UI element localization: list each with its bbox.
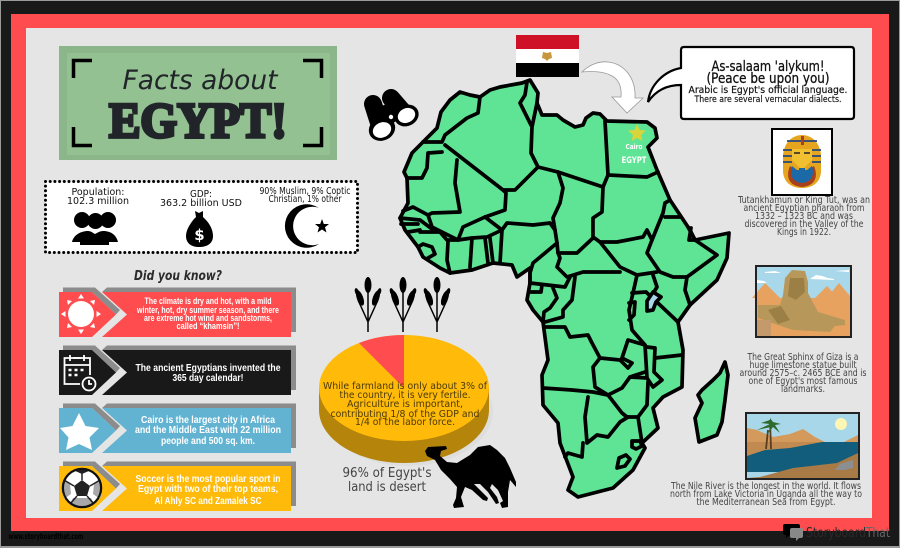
banner: climate: are extreme hot wind and sandstorms, xyxy=(144,313,272,323)
Storyboard That logo: Storyboard xyxy=(806,526,866,541)
speech bubble xyxy=(648,47,854,119)
icon: soccer ball xyxy=(62,468,102,508)
Storyboard That logo xyxy=(783,524,890,541)
image: Nile River xyxy=(746,413,859,479)
GDP stat: GDP: xyxy=(190,189,212,200)
Sphinx caption: around 2575–c. 2465 BCE and is xyxy=(740,368,866,379)
Storyboard That logo: That xyxy=(865,526,890,541)
pie chart: the country, it is very fertile. xyxy=(340,390,470,401)
banner: Cairo: and the Middle East with 22 million xyxy=(135,425,281,436)
banner: Cairo xyxy=(59,404,296,453)
wheat stalk 3 xyxy=(423,277,451,332)
banner: climate: winter, hot, dry summer season, and there xyxy=(136,305,279,315)
Nile caption xyxy=(670,481,862,508)
pie chart: contributing 1/8 of the GDP and xyxy=(330,409,480,420)
Nile caption: the Mediterranean Sea from Egypt. xyxy=(696,497,836,508)
icon: calendar xyxy=(64,355,96,390)
Egypt marker: Cairo xyxy=(626,143,643,151)
wheat stalk 2 xyxy=(389,277,417,332)
speech bubble: As-salaam 'alykum! xyxy=(712,59,824,75)
title panel: EGYPT! xyxy=(109,92,287,148)
icon: sun xyxy=(61,294,101,334)
banner: soccer: Soccer is the most popular sport in xyxy=(136,474,280,485)
pie chart xyxy=(319,335,493,466)
image: Sphinx xyxy=(752,266,851,337)
lake xyxy=(647,292,661,311)
desert caption: 96% of Egypt's xyxy=(342,466,432,481)
banner: soccer xyxy=(59,462,296,511)
Sphinx caption: The Great Sphinx of Giza is a xyxy=(747,352,858,363)
religion stat xyxy=(260,186,350,248)
banner: climate xyxy=(59,288,296,337)
Africa outline xyxy=(400,80,729,497)
title panel xyxy=(59,46,337,160)
banner: calendar xyxy=(59,346,296,395)
pie chart: While farmland is only about 3% of xyxy=(323,381,487,392)
Tutankhamun caption: 1332 – 1323 BC and was xyxy=(755,211,853,222)
banner: climate: called “khamsin”! xyxy=(176,321,240,331)
religion stat: 90% Muslim, 9% Coptic xyxy=(260,186,350,197)
Sphinx caption: landmarks. xyxy=(781,384,825,395)
speech bubble: (Peace be upon you) xyxy=(706,71,830,87)
Egypt marker: EGYPT xyxy=(622,156,647,166)
map of Africa xyxy=(400,80,729,497)
pie chart: 1/4 of the labor force. xyxy=(355,417,455,428)
icon: binoculars xyxy=(365,98,422,145)
speech bubble: Arabic is Egypt's official language. xyxy=(688,85,848,96)
icon: camel xyxy=(425,445,516,508)
population stat: 102.3 million xyxy=(67,196,129,207)
icon: Egyptian flag xyxy=(516,35,579,77)
Tutankhamun caption: ancient Egyptian pharaoh from xyxy=(744,203,864,214)
GDP stat: $ xyxy=(194,226,205,244)
wheat icons xyxy=(354,277,451,332)
banner: calendar: 365 day calendar! xyxy=(172,373,244,384)
Madagascar xyxy=(695,362,728,442)
icon: star xyxy=(60,413,99,450)
Sphinx caption xyxy=(740,352,866,395)
Tutankhamun caption: discovered in the Valley of the xyxy=(744,219,864,230)
image: Tutankhamun mask xyxy=(772,129,832,195)
banner: soccer: Al Ahly SC and Zamalek SC xyxy=(154,496,262,507)
website watermark: www.storyboardthat.com xyxy=(8,532,84,541)
banner: Cairo: people and 500 sq. km. xyxy=(161,436,255,447)
Tutankhamun caption xyxy=(737,195,870,238)
GDP stat xyxy=(160,189,242,247)
population stat xyxy=(67,187,129,245)
banner: Cairo: Cairo is the largest city in Africa xyxy=(141,415,275,426)
desert caption xyxy=(342,466,432,495)
desert caption: land is desert xyxy=(348,480,426,495)
country borders xyxy=(423,97,480,142)
Egypt marker xyxy=(622,124,647,166)
Tutankhamun caption: Tutankhamun or King Tut, was an xyxy=(737,195,870,206)
Sphinx caption: one of Egypt's most famous xyxy=(748,376,858,387)
title panel: Facts about xyxy=(122,65,279,96)
pie chart: Agriculture is important, xyxy=(347,399,463,410)
Tutankhamun caption: Kings in 1922. xyxy=(777,227,831,238)
speech bubble: There are several vernacular dialects. xyxy=(694,95,842,105)
did you know heading: Did you know? xyxy=(134,269,222,284)
Sphinx caption: huge limestone statue built xyxy=(750,360,857,371)
GDP stat: 363.2 billion USD xyxy=(160,198,242,209)
banner: climate: The climate is dry and hot, with a mild xyxy=(144,296,272,306)
banner: soccer: Egypt with two of their top teams, xyxy=(138,484,278,495)
religion stat: Christian, 1% other xyxy=(268,194,342,205)
banner: calendar: The ancient Egyptians invented the xyxy=(136,363,281,374)
wheat stalk 1 xyxy=(354,277,382,332)
arrow from flag to map xyxy=(582,62,643,113)
population stat: Population: xyxy=(72,187,124,198)
stats panel xyxy=(46,182,358,252)
